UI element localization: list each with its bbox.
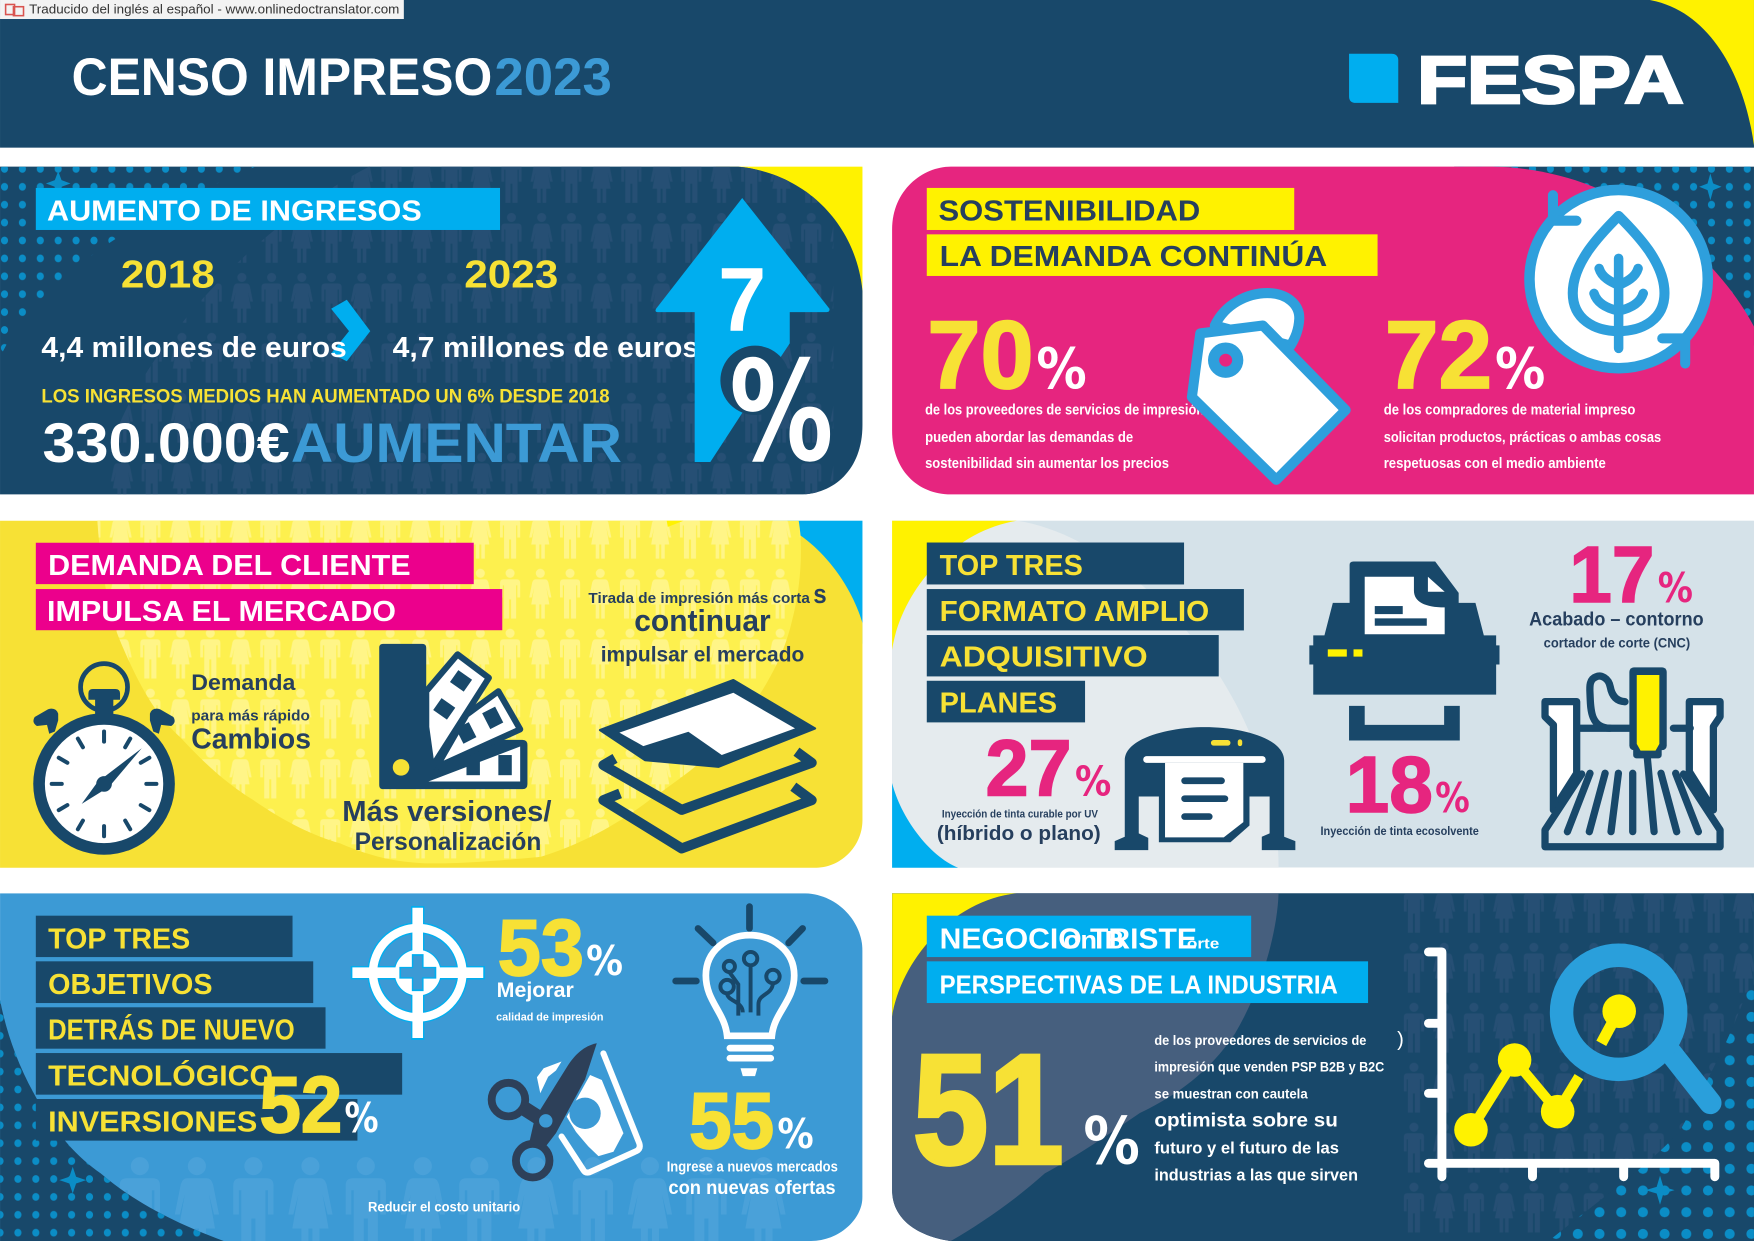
label: demanda del cliente: DEMANDA DEL CLIENTE — [48, 550, 411, 582]
label: top tres planes — [927, 543, 1244, 722]
stat: 52%: 52 — [260, 1060, 342, 1149]
stat: 72% — [1384, 302, 1661, 472]
stat: 55%: Ingrese a nuevos mercados — [667, 1160, 838, 1176]
label: negocio triste: PERSPECTIVAS DE LA INDUSTRIA — [940, 971, 1338, 999]
text: cambios rapidos: Demanda — [191, 670, 296, 695]
label: top tres objetivos: INVERSIONES — [48, 1106, 257, 1138]
icon: stacked sheets — [600, 680, 815, 848]
icon: scissors and money — [492, 1043, 640, 1177]
stat: 53%: Mejorar — [497, 978, 574, 1002]
label: sostenibilidad — [927, 188, 1378, 276]
stat: 55%: con nuevas ofertas — [668, 1178, 836, 1199]
stat: 53% — [496, 903, 623, 1024]
label: negocio triste: orte — [1187, 937, 1219, 953]
header band — [0, 0, 1754, 148]
stat: 18%: Inyección de tinta ecosolvente — [1321, 825, 1479, 838]
translation banner — [0, 0, 404, 19]
label: top tres objetivos: DETRÁS DE NUEVO — [48, 1013, 295, 1047]
panel: sostenibilidad — [892, 167, 1754, 494]
text: reducir costo: Reducir el costo unitario — [368, 1199, 520, 1214]
stat: 70% — [925, 302, 1204, 472]
text: cambios rapidos: Cambios — [191, 723, 311, 755]
label: top tres objetivos — [36, 916, 402, 1141]
revenue values: 4,4 millones de euros — [41, 332, 347, 364]
stat: 53%: calidad de impresión — [496, 1012, 604, 1024]
stat: 70%: 70 — [927, 302, 1034, 409]
icon: flatbed printer — [1115, 727, 1295, 850]
text: tiradas cortas: impulsar el mercado — [601, 643, 804, 667]
years: 2023 — [464, 253, 558, 296]
label: negocio triste: NEGOCIO TRISTE — [940, 924, 1197, 956]
stat: 70%: de los proveedores de servicios de impresión — [925, 402, 1204, 418]
icon: line chart with magnifier — [1428, 952, 1715, 1177]
stat: 27%: 27 — [986, 723, 1072, 812]
stat: 53%: % — [586, 937, 623, 985]
label: aumento de ingresos: AUMENTO DE INGRESOS — [47, 195, 422, 227]
stat: 27%: Inyección de tinta curable por UV — [942, 809, 1098, 821]
label: sostenibilidad: SOSTENIBILIDAD — [939, 195, 1200, 227]
revenue values — [41, 332, 699, 364]
stat: 17%: 17 — [1569, 530, 1654, 619]
icon: leaf in recycling circle — [1529, 190, 1708, 368]
label: top tres planes: PLANES — [940, 688, 1057, 720]
years — [121, 253, 558, 296]
panel: objetivos de inversion — [0, 893, 862, 1241]
text: tiradas cortas — [588, 579, 827, 667]
label: top tres objetivos: OBJETIVOS — [48, 969, 213, 1001]
label: top tres objetivos: TOP TRES — [48, 924, 190, 956]
label: demanda del cliente — [36, 543, 502, 630]
big figure: 330.000€ — [43, 411, 290, 474]
stat: 17% — [1529, 530, 1704, 651]
title: 2023 — [494, 48, 612, 107]
big figure — [43, 411, 622, 474]
text: proveedores: futuro y el futuro de las — [1154, 1139, 1339, 1157]
text: versiones: Más versiones/ — [342, 796, 551, 828]
text: proveedores: industrias a las que sirven — [1154, 1167, 1358, 1185]
label: negocio triste — [927, 916, 1368, 1003]
text: cambios rapidos: para más rápido — [191, 707, 310, 724]
label: aumento de ingresos — [36, 188, 500, 230]
text: versiones — [342, 796, 551, 856]
icon: up arrow 7%: % — [729, 331, 833, 493]
big figure: AUMENTAR — [291, 411, 622, 474]
text: proveedores: optimista sobre su — [1154, 1110, 1338, 1131]
stat: 72%: 72 — [1385, 302, 1492, 409]
years: 2018 — [121, 253, 215, 296]
FESPA logo — [1349, 43, 1684, 118]
stat: 27%: % — [1075, 757, 1111, 805]
stat: 72%: % — [1495, 337, 1545, 402]
icon: colour swatch fan — [379, 644, 527, 789]
text: cambios rapidos — [191, 670, 311, 755]
stat: 52%: % — [345, 1094, 379, 1142]
stat: 53%: 53 — [498, 903, 584, 992]
stat: 27% — [937, 723, 1111, 845]
chevron arrow — [331, 300, 370, 361]
text: proveedores: se muestran con cautela — [1154, 1085, 1308, 1101]
stat: 27%: (híbrido o plano) — [937, 823, 1101, 845]
icon: target — [351, 906, 485, 1040]
stat: 17%: Acabado – contorno — [1529, 609, 1704, 630]
stat: 55% — [667, 1076, 838, 1199]
stat: 72%: de los compradores de material impreso — [1384, 402, 1636, 418]
text: tiradas cortas: s — [813, 579, 827, 609]
label: negocio triste: on B — [1064, 928, 1124, 955]
stat: 18%: 18 — [1346, 740, 1433, 829]
label: sostenibilidad: LA DEMANDA CONTINÚA — [940, 239, 1327, 273]
stat: 18% — [1321, 740, 1479, 838]
average revenue note: LOS INGRESOS MEDIOS HAN AUMENTADO UN 6% DESDE 2018 — [41, 387, 610, 408]
stat: 55%: 55 — [689, 1076, 774, 1165]
stat: 17%: % — [1658, 564, 1693, 612]
title: CENSO IMPRESO — [72, 48, 492, 107]
text: proveedores — [1154, 1029, 1404, 1185]
icon: CNC cutter — [1545, 667, 1720, 847]
text: proveedores: de los proveedores de servicios de — [1154, 1032, 1367, 1048]
stat: 55%: % — [777, 1110, 814, 1158]
text: proveedores: impresión que venden PSP B2B y B2C — [1154, 1059, 1384, 1075]
panel: top tres formato amplio — [892, 521, 1754, 868]
stat: 70%: % — [1036, 337, 1087, 402]
stat: 70%: pueden abordar las demandas de — [925, 430, 1133, 446]
panel: demanda del cliente — [0, 520, 862, 869]
revenue values: 4,7 millones de euros — [393, 332, 699, 364]
text: versiones: Personalización — [355, 829, 541, 856]
stat: 51%: 51 — [913, 1022, 1064, 1197]
icon: light bulb — [676, 907, 825, 1076]
stat: 72%: solicitan productos, prácticas o ambas cosas — [1384, 430, 1661, 446]
text: proveedores: ) — [1397, 1029, 1404, 1051]
icon: price tag — [1192, 293, 1346, 480]
FESPA logo: FESPA — [1417, 43, 1684, 118]
text: tiradas cortas: continuar — [634, 605, 771, 638]
icon: stopwatch — [33, 664, 175, 855]
stat: 70%: sostenibilidad sin aumentar los precios — [925, 456, 1169, 472]
panel: perspectivas de la industria — [892, 893, 1754, 1241]
text: tiradas cortas: Tirada de impresión más corta — [588, 590, 810, 607]
stat: 18%: % — [1435, 774, 1470, 822]
label: top tres planes: TOP TRES — [940, 550, 1083, 582]
panel: aumento de ingresos — [0, 167, 862, 494]
label: top tres planes: FORMATO AMPLIO — [940, 596, 1209, 628]
icon: up arrow 7%: 7 — [718, 250, 766, 351]
label: top tres planes: ADQUISITIVO — [940, 642, 1148, 674]
icon: up arrow 7% — [656, 198, 833, 493]
stat: 72%: respetuosas con el medio ambiente — [1384, 456, 1606, 472]
label: top tres objetivos: TECNOLÓGICO — [48, 1059, 273, 1093]
label: demanda del cliente: IMPULSA EL MERCADO — [47, 596, 396, 628]
stat: 17%: cortador de corte (CNC) — [1544, 635, 1690, 651]
translation banner: Traducido del inglés al español - www.onlinedoctranslator.com — [29, 1, 399, 16]
stat: 51%: % — [1083, 1104, 1140, 1179]
icon: desktop printer — [1309, 562, 1499, 733]
